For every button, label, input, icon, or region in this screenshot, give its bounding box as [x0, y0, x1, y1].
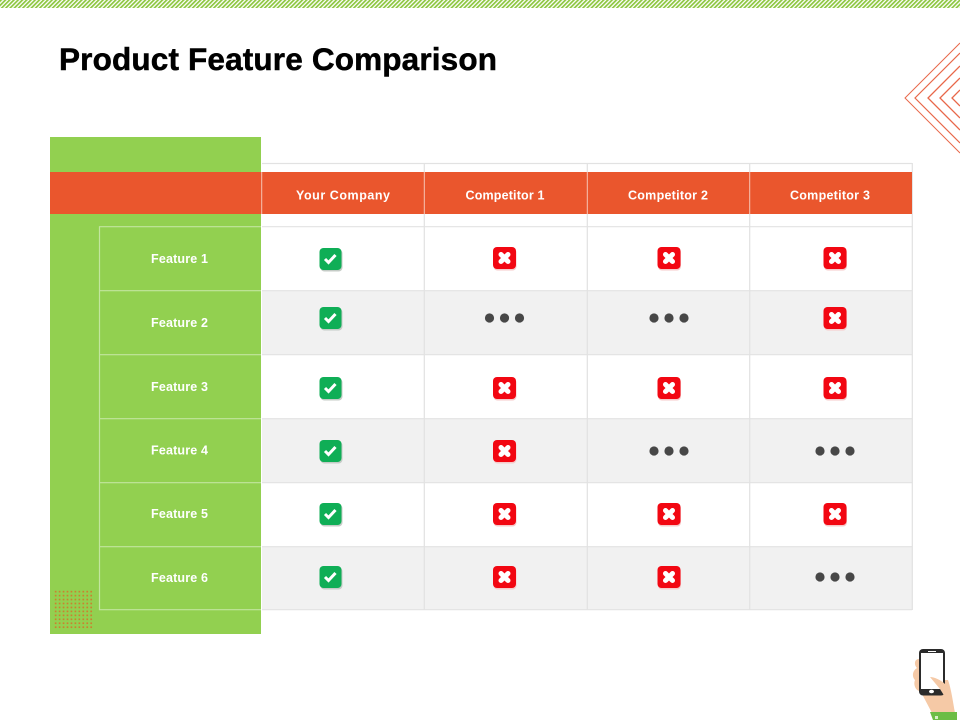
- title: Product Feature Comparison: [59, 41, 497, 77]
- icon: hand holding phone: [913, 649, 957, 720]
- icons: row 1: [320, 247, 847, 272]
- icons: row 6: [320, 566, 855, 590]
- header band: [50, 172, 912, 214]
- feature labels: Feature 3: [151, 380, 208, 394]
- header: your company: Your Company: [296, 188, 390, 202]
- feature labels: [99, 227, 261, 610]
- feature labels: Feature 1: [151, 252, 208, 266]
- icons: row 4: [320, 440, 855, 464]
- top hatched stripe: [0, 0, 960, 8]
- decorative diamond lines: [905, 43, 960, 153]
- dotted texture: [54, 590, 94, 630]
- panel: green feature column: [50, 137, 261, 634]
- header: competitor 2: Competitor 2: [628, 188, 708, 202]
- feature labels: Feature 5: [151, 507, 208, 521]
- icons: row 3: [320, 377, 847, 400]
- header: competitor 3: Competitor 3: [790, 188, 870, 202]
- icons: row 5: [320, 503, 847, 526]
- feature labels: Feature 4: [151, 444, 208, 458]
- table body grid: [262, 163, 912, 610]
- feature labels: Feature 6: [151, 571, 208, 585]
- icons: row 2: [320, 307, 847, 330]
- feature labels: Feature 2: [151, 316, 208, 330]
- header: competitor 1: Competitor 1: [466, 188, 545, 202]
